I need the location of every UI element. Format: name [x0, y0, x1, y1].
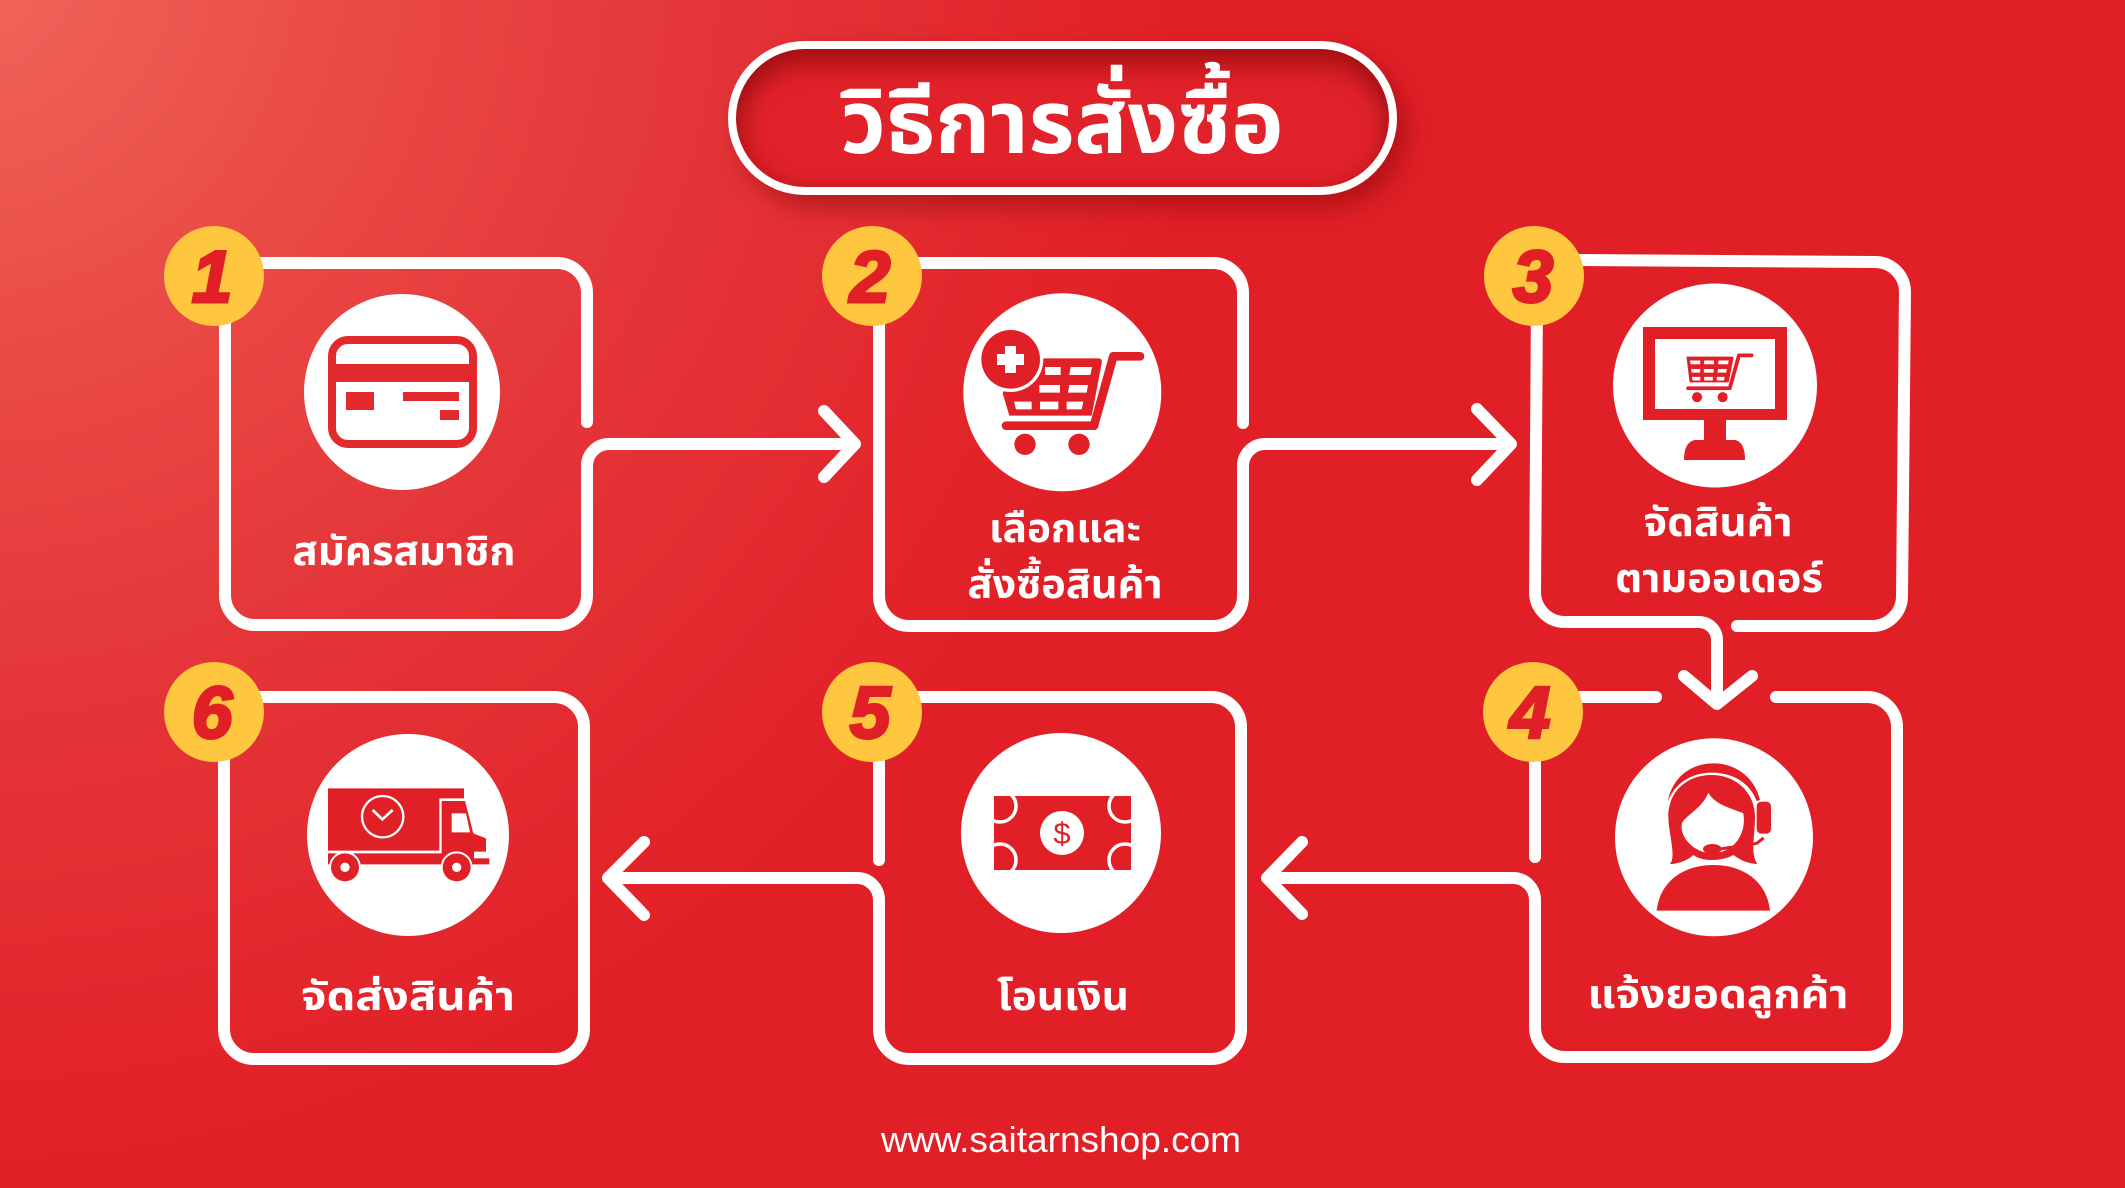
badge 3: 3 — [1513, 237, 1553, 318]
frame and arrow to step 4 — [1535, 260, 1905, 704]
label: จัดส่งสินค้า — [301, 974, 515, 1019]
frame and arrow to step 3 — [872, 263, 1511, 626]
label: ตามออเดอร์ — [1615, 557, 1823, 601]
badge 4 — [1483, 662, 1583, 762]
icon: delivery truck with clock — [307, 734, 509, 936]
icon: banknote — [961, 733, 1161, 933]
website URL: www.saitarnshop.com — [880, 1119, 1241, 1160]
badge 1: 1 — [192, 237, 232, 318]
badge 1 — [164, 226, 264, 326]
label — [1615, 500, 1823, 601]
badge 3 — [1484, 226, 1584, 326]
badge 6 — [164, 662, 264, 762]
title pill — [728, 41, 1397, 195]
label: สมัครสมาชิก — [292, 530, 516, 574]
panel: step 5 — [608, 662, 1241, 1059]
panel: step 6 — [164, 662, 584, 1059]
icon: credit card — [304, 294, 500, 490]
panel: step 3 — [1484, 226, 1905, 704]
title pill: วิธีการสั่งซื้อ — [840, 61, 1284, 172]
badge 4: 4 — [1508, 673, 1550, 754]
frame and arrow to step 5 — [1267, 697, 1897, 1057]
panel: step 4 — [1267, 662, 1897, 1057]
frame — [224, 697, 584, 1059]
panel: step 2 — [822, 226, 1511, 626]
label: โอนเงิน — [997, 975, 1129, 1019]
icon: banknote: $ — [1053, 816, 1071, 851]
label: แจ้งยอดลูกค้า — [1588, 972, 1848, 1019]
badge 6: 6 — [192, 673, 233, 754]
badge 2: 2 — [848, 237, 890, 318]
icon: monitor with cart — [1613, 284, 1817, 488]
label — [968, 507, 1162, 607]
badge 2 — [822, 226, 922, 326]
frame and arrow to step 6 — [608, 697, 1241, 1059]
badge 5: 5 — [850, 673, 892, 754]
panel: step 1 — [164, 226, 855, 625]
frame and arrow to step 2 — [214, 263, 855, 625]
label: จัดสินค้า — [1644, 500, 1792, 545]
icon: cart with plus — [963, 293, 1161, 491]
badge 5 — [822, 662, 922, 762]
icon: call-centre agent — [1615, 738, 1813, 936]
flow diagram — [164, 226, 1911, 1160]
label: เลือกและ — [989, 507, 1141, 551]
label: สั่งซื้อสินค้า — [968, 556, 1162, 607]
